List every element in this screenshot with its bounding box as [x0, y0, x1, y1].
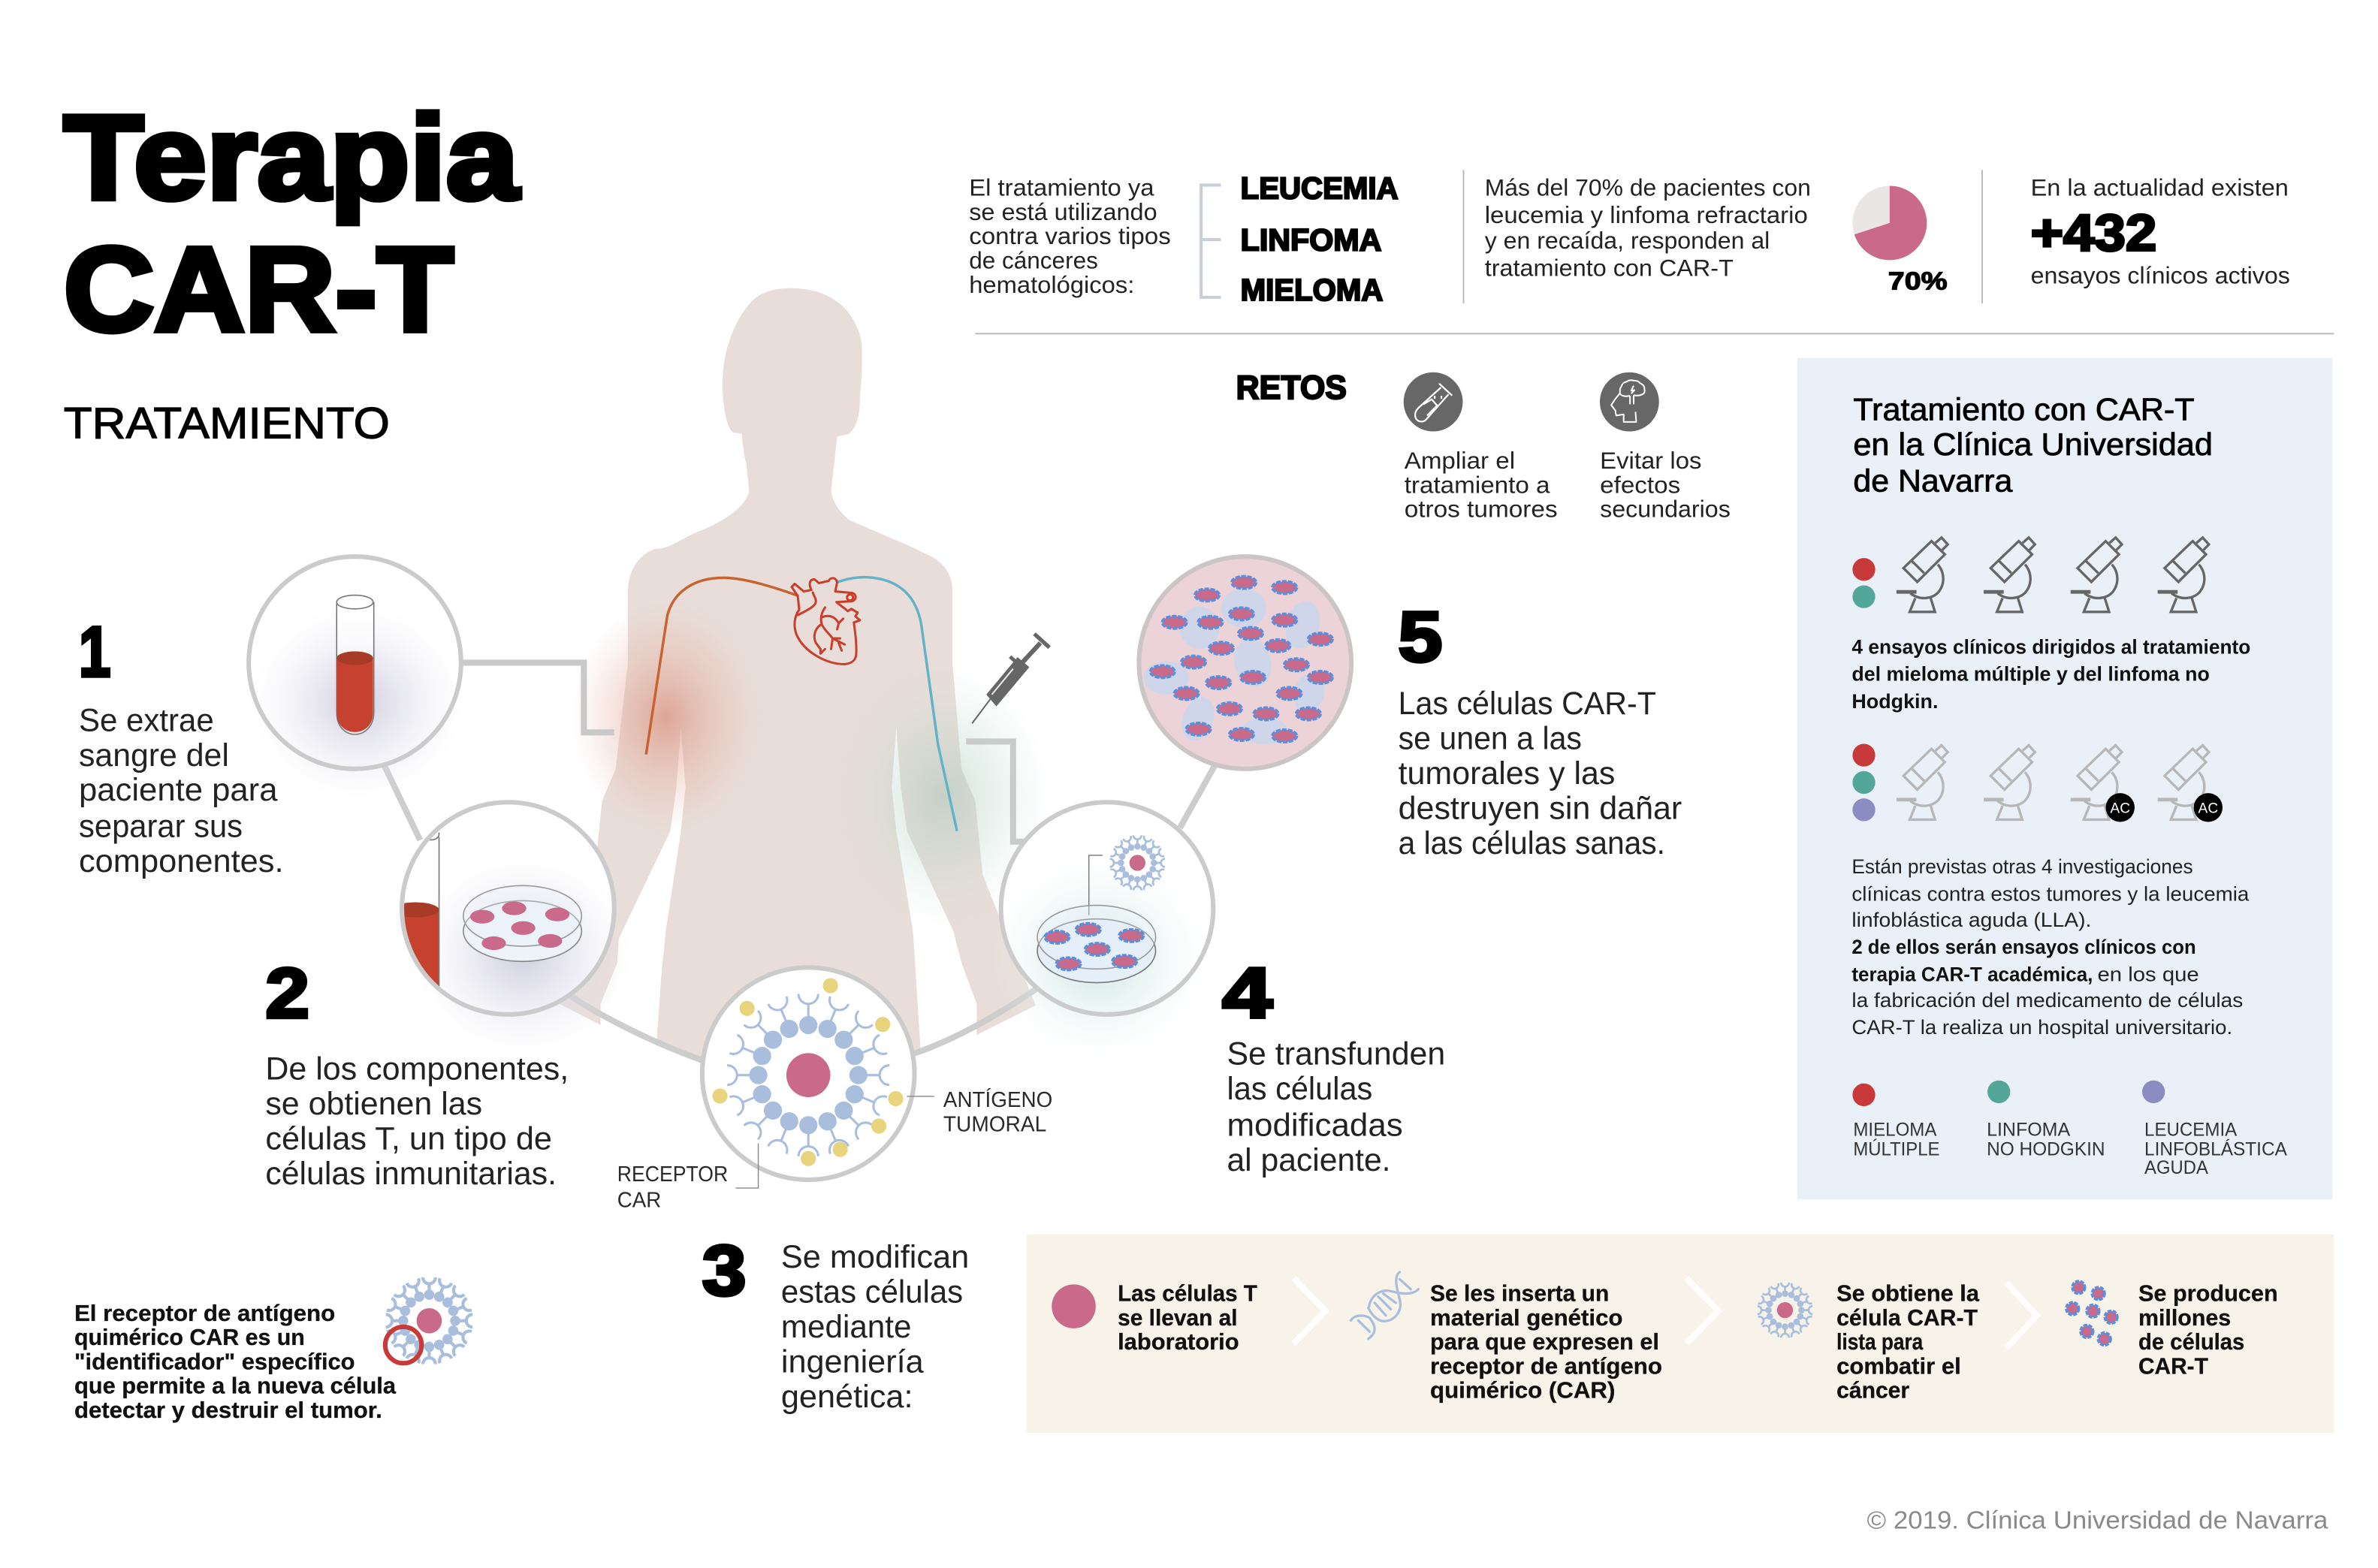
heading: step 5 — [1399, 597, 1682, 861]
heading: step 1 — [79, 613, 284, 879]
label: antígeno tumoral — [907, 1087, 1052, 1135]
legend dots row 2 — [1852, 743, 1876, 821]
heading: step 3: estas células — [781, 1274, 963, 1310]
heading: step 1: paciente para — [79, 772, 278, 807]
heading: step 2: De los componentes, — [265, 1051, 569, 1087]
heading: step 5: se unen a las — [1399, 721, 1582, 756]
text block: response rate: leucemia y linfoma refractario — [1485, 202, 1808, 228]
text: planned trials: la fabricación del medicamento de células — [1851, 988, 2243, 1012]
text block: response rate — [1485, 175, 1811, 282]
icons: microscopes row 1 — [1897, 538, 2209, 612]
subtitle: TRATAMIENTO — [64, 400, 390, 448]
text block: challenge 2: secundarios — [1600, 496, 1731, 523]
connector: step 3 to step 4 — [913, 988, 1039, 1054]
arrow: chevron — [2006, 1283, 2037, 1348]
text block: challenge 1: otros tumores — [1405, 496, 1558, 523]
heading: step 4: Se transfunden — [1227, 1036, 1445, 1072]
stat: active trials: En la actualidad existen — [2031, 175, 2289, 201]
text: step b — [1430, 1282, 1662, 1404]
stat: active trials: +432 — [2031, 204, 2156, 261]
icon: CAR-T cell with highlighted receptor — [385, 1277, 472, 1364]
text: step a: Las células T — [1118, 1282, 1257, 1307]
icon: DNA — [1350, 1272, 1418, 1339]
title: CAR-T — [64, 222, 454, 356]
heading: step 3: genética: — [781, 1379, 913, 1414]
text: step b: receptor de antígeno — [1430, 1354, 1662, 1379]
text: planned trials: clínicas contra estos tumores y la leucemia — [1851, 882, 2250, 905]
legend: mieloma: MIELOMA — [1853, 1119, 1937, 1140]
text: step d: de células — [2138, 1330, 2244, 1355]
panel: CAR-T production process — [1027, 1235, 2334, 1433]
heading: step 2: se obtienen las — [265, 1086, 482, 1121]
text: step d: Se producen — [2138, 1282, 2278, 1307]
text: step c: Se obtiene la — [1836, 1282, 1980, 1307]
text: step b: material genético — [1430, 1306, 1622, 1331]
connector: step 4 to step 5 — [1180, 763, 1216, 828]
connector: step 2 to step 3 — [567, 994, 705, 1062]
text: planned trials: terapia CAR-T académica, — [1851, 962, 2093, 985]
antigens — [712, 978, 904, 1166]
heading: step 4: las células — [1227, 1071, 1372, 1106]
heading: step 1: separar sus — [79, 809, 243, 844]
credit: © 2019. Clínica Universidad de Navarra — [1867, 1506, 2328, 1534]
icon: CAR-T cell — [1758, 1283, 1812, 1337]
text block: response rate: Más del 70% de pacientes con — [1485, 175, 1811, 201]
heading: step 3 — [702, 1231, 969, 1414]
text: planned trials: en los que — [2097, 962, 2199, 985]
heading: step 2: células inmunitarias. — [265, 1156, 557, 1191]
heading: step 2 — [265, 954, 569, 1191]
heading: clinic: Tratamiento con CAR-T — [1853, 392, 2195, 427]
icon: CAR-T cell binding antigens — [727, 994, 889, 1156]
heading: step 4: 4 — [1222, 954, 1272, 1033]
heading: step 1: Se extrae — [79, 702, 214, 737]
text: step d: CAR-T — [2138, 1354, 2208, 1379]
text: step c: combatir el — [1836, 1354, 1961, 1379]
heading: step 5: 5 — [1399, 597, 1442, 677]
glow: extraction site — [572, 602, 760, 833]
text block: challenge 2: Evitar los — [1600, 448, 1701, 474]
panel: clinical trials — [1797, 358, 2332, 1199]
callout: CAR receptor: quimérico CAR es un — [74, 1325, 305, 1350]
legend: leucemia: LINFOBLÁSTICA — [2144, 1138, 2287, 1160]
panel: step 1 circle — [249, 556, 464, 799]
heading: step 4: modificadas — [1227, 1107, 1403, 1142]
callout: CAR receptor — [74, 1301, 397, 1423]
legend: linfoma — [1987, 1081, 2105, 1160]
body silhouette — [554, 288, 1036, 1092]
icon: petri dish — [463, 885, 581, 961]
text: step b: Se les inserta un — [1430, 1282, 1609, 1307]
heading: step 1: 1 — [79, 613, 110, 692]
text: planned trials: CAR-T la realiza un hospital universitario. — [1851, 1015, 2232, 1039]
icon: blood tube cropped — [404, 832, 440, 987]
legend: linfoma: LINFOMA — [1987, 1119, 2070, 1140]
panel: step 3 circle — [702, 967, 915, 1180]
pie chart: 70% — [1852, 185, 1948, 296]
text block: challenge 2 — [1600, 448, 1731, 523]
text: step c: lista para — [1836, 1330, 1924, 1355]
text: step a: se llevan al — [1118, 1306, 1238, 1331]
icon: heart — [792, 578, 860, 664]
legend: mieloma — [1852, 1084, 1939, 1160]
legend: leucemia: LEUCEMIA — [2144, 1119, 2237, 1140]
heading: step 2: 2 — [265, 954, 309, 1033]
heading: step 5: a las células sanas. — [1399, 825, 1665, 861]
blood vessel: vein — [837, 577, 957, 831]
heading: step 1: componentes. — [79, 843, 284, 879]
text block: types intro: se está utilizando — [969, 199, 1157, 225]
panel: step 5 circle — [1139, 556, 1351, 769]
pie chart: 70%: 70% — [1888, 268, 1948, 296]
glow: infusion site — [837, 666, 1049, 927]
icon: blood tube — [336, 596, 374, 734]
text: step c: cáncer — [1836, 1379, 1909, 1404]
icon: syringe — [972, 634, 1049, 723]
text: current trials: Hodgkin. — [1851, 689, 1938, 713]
text: step c — [1836, 1282, 1980, 1404]
text: planned trials: 2 de ellos serán ensayos clínicos con — [1851, 935, 2196, 958]
label: antígeno tumoral: ANTÍGENO — [943, 1087, 1052, 1111]
panel: step 4 circle — [988, 802, 1213, 1058]
text: planned trials: Están previstas otras 4 investigaciones — [1851, 855, 2193, 878]
heading: step 5: destruyen sin dañar — [1399, 790, 1682, 825]
text: step b: para que expresen el — [1430, 1330, 1659, 1355]
text block: response rate: tratamiento con CAR-T — [1485, 255, 1734, 282]
text block: challenge 1: Ampliar el — [1405, 448, 1515, 474]
heading: step 2: células T, un tipo de — [265, 1121, 552, 1156]
label: receptor CAR: RECEPTOR — [617, 1162, 728, 1186]
text: step a — [1118, 1282, 1257, 1355]
label: antígeno tumoral: TUMORAL — [943, 1111, 1046, 1135]
label: receptor CAR — [617, 1144, 759, 1211]
text block: challenge 1 — [1405, 448, 1558, 523]
heading: retos: RETOS — [1236, 369, 1347, 406]
icon: test tube — [1404, 372, 1462, 432]
title — [64, 91, 520, 356]
legend: leucemia — [2142, 1081, 2287, 1178]
badge: academic trial: AC — [2110, 801, 2130, 816]
text block: types intro — [969, 175, 1171, 298]
icon: T cell — [1052, 1284, 1096, 1328]
heading: step 3: Se modifican — [781, 1239, 969, 1274]
icon: brain head — [1600, 372, 1659, 432]
tumor cells — [1143, 589, 1329, 746]
legend: leucemia: AGUDA — [2144, 1157, 2208, 1178]
legend: linfoma: NO HODGKIN — [1987, 1139, 2105, 1160]
heading: clinic — [1853, 392, 2213, 498]
text block: challenge 1: tratamiento a — [1405, 472, 1550, 498]
text: planned trials: linfoblástica aguda (LLA). — [1851, 908, 2091, 931]
icon: small CAR-T cell — [1110, 835, 1165, 891]
stat: active trials — [2031, 175, 2290, 289]
connector: step 1 to step 2 — [384, 764, 420, 840]
badge: academic trial — [2194, 793, 2223, 822]
icon: multiplied cells — [2066, 1281, 2117, 1345]
label: receptor CAR: CAR — [617, 1187, 661, 1211]
text block: challenge 2: efectos — [1600, 472, 1680, 498]
heading: step 3: mediante — [781, 1309, 911, 1344]
text block: response rate: y en recaída, responden al — [1485, 228, 1770, 254]
text: step d — [2138, 1282, 2278, 1379]
list: cancer types: LEUCEMIA — [1241, 171, 1399, 206]
heading: step 5: Las células CAR-T — [1399, 686, 1656, 721]
text block: types intro: hematológicos: — [969, 272, 1134, 298]
text: step c: célula CAR-T — [1836, 1306, 1978, 1331]
connector: step 1 to body — [461, 662, 614, 732]
text block: types intro: de cánceres — [969, 247, 1098, 273]
panel: step 2 circle — [400, 800, 617, 1026]
icons: microscopes row 2 — [1897, 746, 2209, 819]
text block: types intro: contra varios tipos — [969, 223, 1171, 249]
title: Terapia — [64, 91, 520, 225]
callout: CAR receptor: que permite a la nueva célula — [74, 1374, 397, 1399]
bracket — [1201, 185, 1221, 297]
arrow: chevron — [1293, 1278, 1326, 1343]
legend: mieloma: MÚLTIPLE — [1853, 1138, 1939, 1160]
text: step a: laboratorio — [1118, 1330, 1239, 1355]
heading: clinic: de Navarra — [1853, 463, 2013, 498]
text: current trials — [1851, 635, 2250, 713]
icon: petri dish with CAR-T cells — [1037, 906, 1156, 983]
text: step d: millones — [2138, 1306, 2231, 1331]
badge: academic trial — [2106, 793, 2135, 822]
arrow: chevron — [1686, 1278, 1719, 1343]
list: cancer types — [1241, 171, 1399, 307]
heading: step 4 — [1222, 954, 1445, 1178]
heading: step 3: ingeniería — [781, 1343, 924, 1379]
text: current trials: del mieloma múltiple y del linfoma no — [1851, 662, 2210, 686]
connector: body to step 4 — [966, 741, 1037, 842]
heading: step 3: 3 — [702, 1231, 746, 1310]
blood vessel: artery — [646, 577, 798, 755]
text: current trials: 4 ensayos clínicos dirigidos al tratamiento — [1851, 635, 2250, 658]
text: step b: quimérico (CAR) — [1430, 1379, 1615, 1404]
text: planned trials — [1851, 855, 2250, 1039]
text block: types intro: El tratamiento ya — [969, 175, 1154, 201]
callout: CAR receptor: detectar y destruir el tumor. — [74, 1398, 382, 1423]
list: cancer types: MIELOMA — [1241, 273, 1383, 307]
stat: active trials: ensayos clínicos activos — [2031, 263, 2290, 289]
callout: CAR receptor: El receptor de antígeno — [74, 1301, 335, 1326]
callout: CAR receptor: "identificador" específico — [74, 1349, 355, 1374]
heading: step 4: al paciente. — [1227, 1142, 1391, 1178]
list: cancer types: LINFOMA — [1241, 222, 1381, 257]
heading: clinic: en la Clínica Universidad — [1853, 427, 2213, 462]
legend dots row 1 — [1852, 558, 1876, 608]
badge: academic trial: AC — [2198, 801, 2218, 816]
CAR-T cells — [1151, 577, 1332, 742]
heading: step 5: tumorales y las — [1399, 755, 1615, 791]
heading: step 1: sangre del — [79, 737, 229, 773]
